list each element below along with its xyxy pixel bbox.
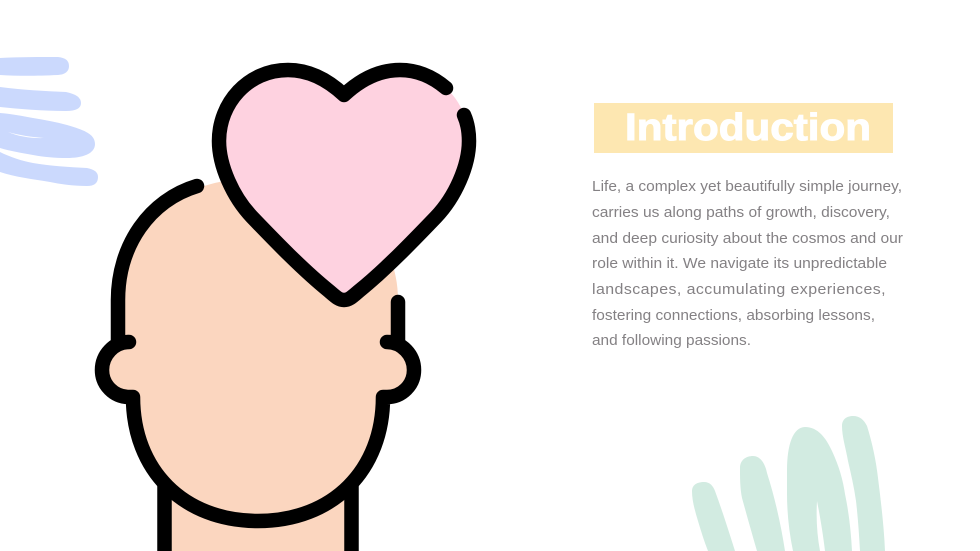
- heading: Introduction: Introduction: [625, 107, 871, 149]
- icon: heart: [219, 70, 469, 300]
- text block: introduction body: Life, a complex yet beautifully simple journey,: [592, 178, 902, 195]
- text block: introduction body: [592, 178, 903, 349]
- text block: introduction body: carries us along paths of growth, discovery,: [592, 204, 890, 221]
- head: [102, 178, 414, 521]
- text block: introduction body: fostering connections, absorbing lessons,: [592, 307, 875, 324]
- text block: introduction body: landscapes, accumulating experiences,: [592, 281, 886, 298]
- decoration: green brush strokes: [692, 416, 885, 551]
- illustration: person with heart: [102, 70, 469, 551]
- decoration: blue brush strokes: [0, 57, 98, 186]
- text block: introduction body: and deep curiosity about the cosmos and our: [592, 230, 903, 247]
- neck: [164, 470, 352, 551]
- text block: introduction body: and following passions.: [592, 332, 751, 349]
- heading: Introduction: [594, 103, 893, 153]
- text block: introduction body: role within it. We navigate its unpredictable: [592, 255, 887, 272]
